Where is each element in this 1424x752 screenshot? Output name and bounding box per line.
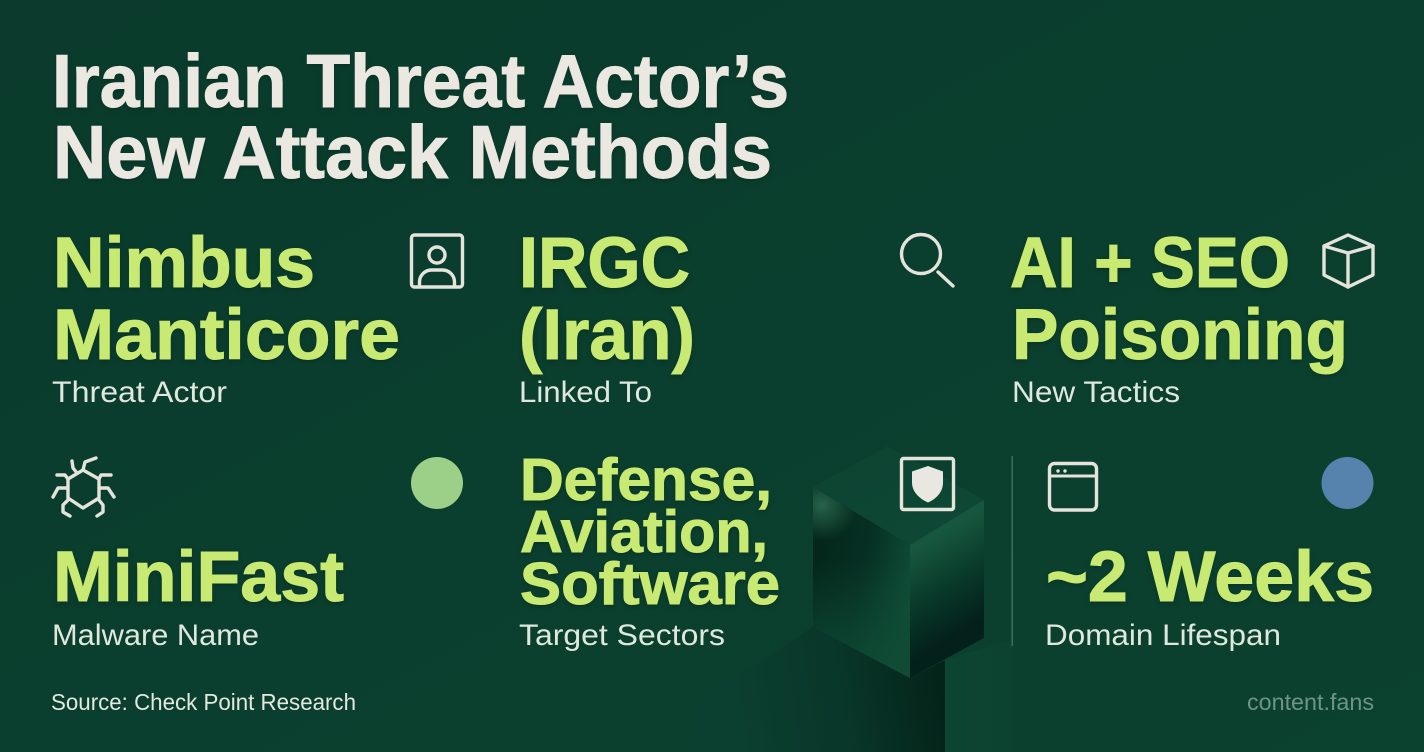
brand: content.fans: [1247, 689, 1374, 715]
icon: cube: [1324, 235, 1373, 287]
heading: ~2 Weeks: ~2 Weeks: [1046, 538, 1374, 617]
heading: AI + SEO Poisoning: Poisoning: [1012, 296, 1348, 375]
title: [52, 39, 789, 194]
icon: magnifier: [902, 234, 953, 286]
panel: linked to: [519, 224, 953, 409]
heading: AI + SEO Poisoning: AI + SEO: [1010, 224, 1290, 303]
heading: Defense, Aviation, Software: [520, 447, 780, 617]
label: new tactics: New Tactics: [1012, 376, 1180, 409]
heading: Defense, Aviation, Software: Defense,: [520, 447, 772, 513]
heading: IRGC (Iran): (Iran): [519, 296, 695, 375]
status dot: blue: [1322, 457, 1374, 509]
heading: IRGC (Iran): IRGC: [519, 224, 690, 303]
heading: Nimbus Manticore: Manticore: [53, 296, 400, 375]
icon: shield: [902, 458, 954, 510]
label: target sectors: Target Sectors: [519, 619, 725, 652]
heading: AI + SEO Poisoning: [1010, 224, 1348, 375]
label: domain lifespan: Domain Lifespan: [1045, 619, 1281, 652]
panel: target sectors: [519, 447, 954, 652]
heading: MiniFast: MiniFast: [53, 538, 344, 617]
decorative isometric cube: [690, 446, 1012, 752]
divider line: [1012, 456, 1013, 646]
label: malware name: Malware Name: [52, 619, 259, 652]
icon: user portrait: [412, 235, 462, 287]
heading: Defense, Aviation, Software: Software: [520, 551, 780, 617]
panel: new tactics: [1010, 224, 1373, 409]
heading: Nimbus Manticore: Nimbus: [53, 224, 315, 303]
panel: malware name: [52, 457, 463, 652]
heading: Defense, Aviation, Software: Aviation,: [520, 499, 768, 565]
panel: domain lifespan: [1012, 456, 1374, 652]
heading: Nimbus Manticore: [53, 224, 400, 375]
icon: bug: [53, 458, 114, 516]
icon: browser window: [1050, 464, 1096, 510]
label: linked to: Linked To: [519, 376, 652, 409]
status dot: green: [411, 457, 463, 509]
title: Iranian Threat Actor’s: [52, 39, 789, 123]
label: threat actor: Threat Actor: [52, 376, 227, 409]
source: Source: Check Point Research: [51, 689, 356, 715]
heading: IRGC (Iran): [519, 224, 695, 375]
panel: threat actor: [52, 224, 462, 409]
title: New Attack Methods: [53, 110, 772, 194]
